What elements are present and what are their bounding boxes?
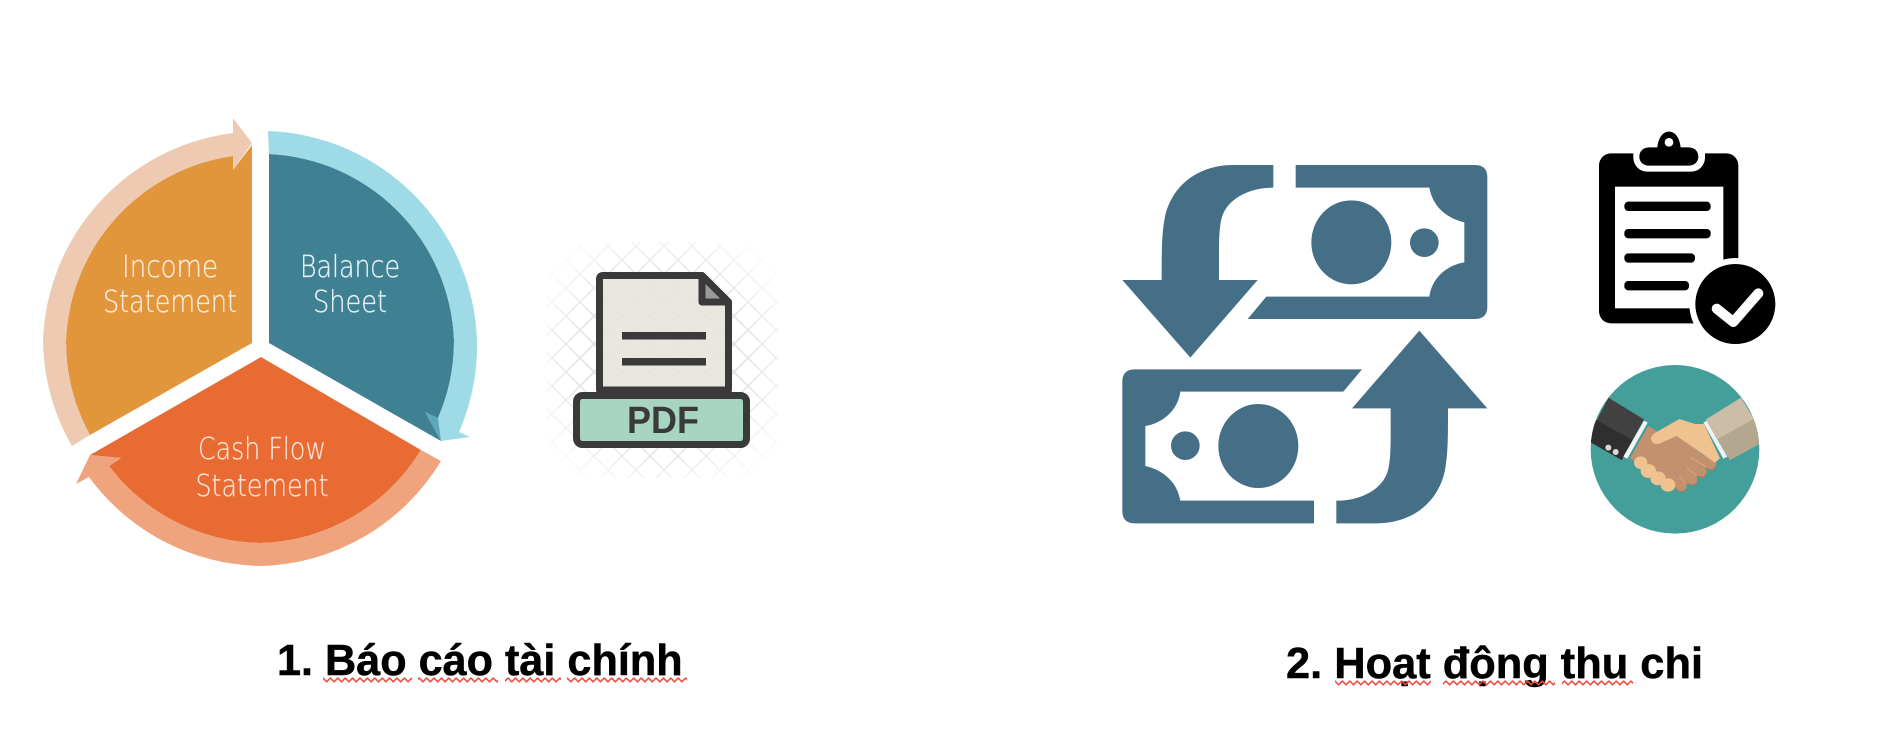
cycle diagram: financial statements	[43, 118, 477, 566]
segment: balance sheet: Balance	[300, 250, 400, 285]
segment: income statement: Income	[122, 250, 218, 285]
banknote: top	[1248, 165, 1487, 319]
clasped hands	[1623, 419, 1727, 492]
arrow: down	[1122, 165, 1273, 358]
segment: income statement	[43, 118, 252, 446]
icon: PDF document: PDF	[627, 400, 699, 442]
left sleeve	[1587, 398, 1644, 460]
right sleeve	[1706, 398, 1760, 460]
segment: income statement: Statement	[103, 285, 237, 320]
icon: money exchange	[1122, 165, 1487, 523]
icon: PDF document	[547, 242, 778, 478]
segment: balance sheet: Sheet	[313, 285, 387, 320]
segment: cash flow statement	[76, 357, 441, 566]
banknote: bottom	[1122, 369, 1362, 523]
segment: cash flow statement: Statement	[196, 469, 328, 504]
heading: financial report: 1. Báo cáo tài chính	[277, 637, 683, 685]
arrow: up	[1336, 331, 1487, 523]
segment: balance sheet	[268, 131, 477, 441]
segment: cash flow statement: Cash Flow	[198, 432, 326, 467]
icon: clipboard with check mark	[1599, 132, 1781, 350]
icon: handshake	[1587, 365, 1767, 534]
heading: income and expenditure: 2. Hoạt động thu chi	[1286, 640, 1703, 688]
